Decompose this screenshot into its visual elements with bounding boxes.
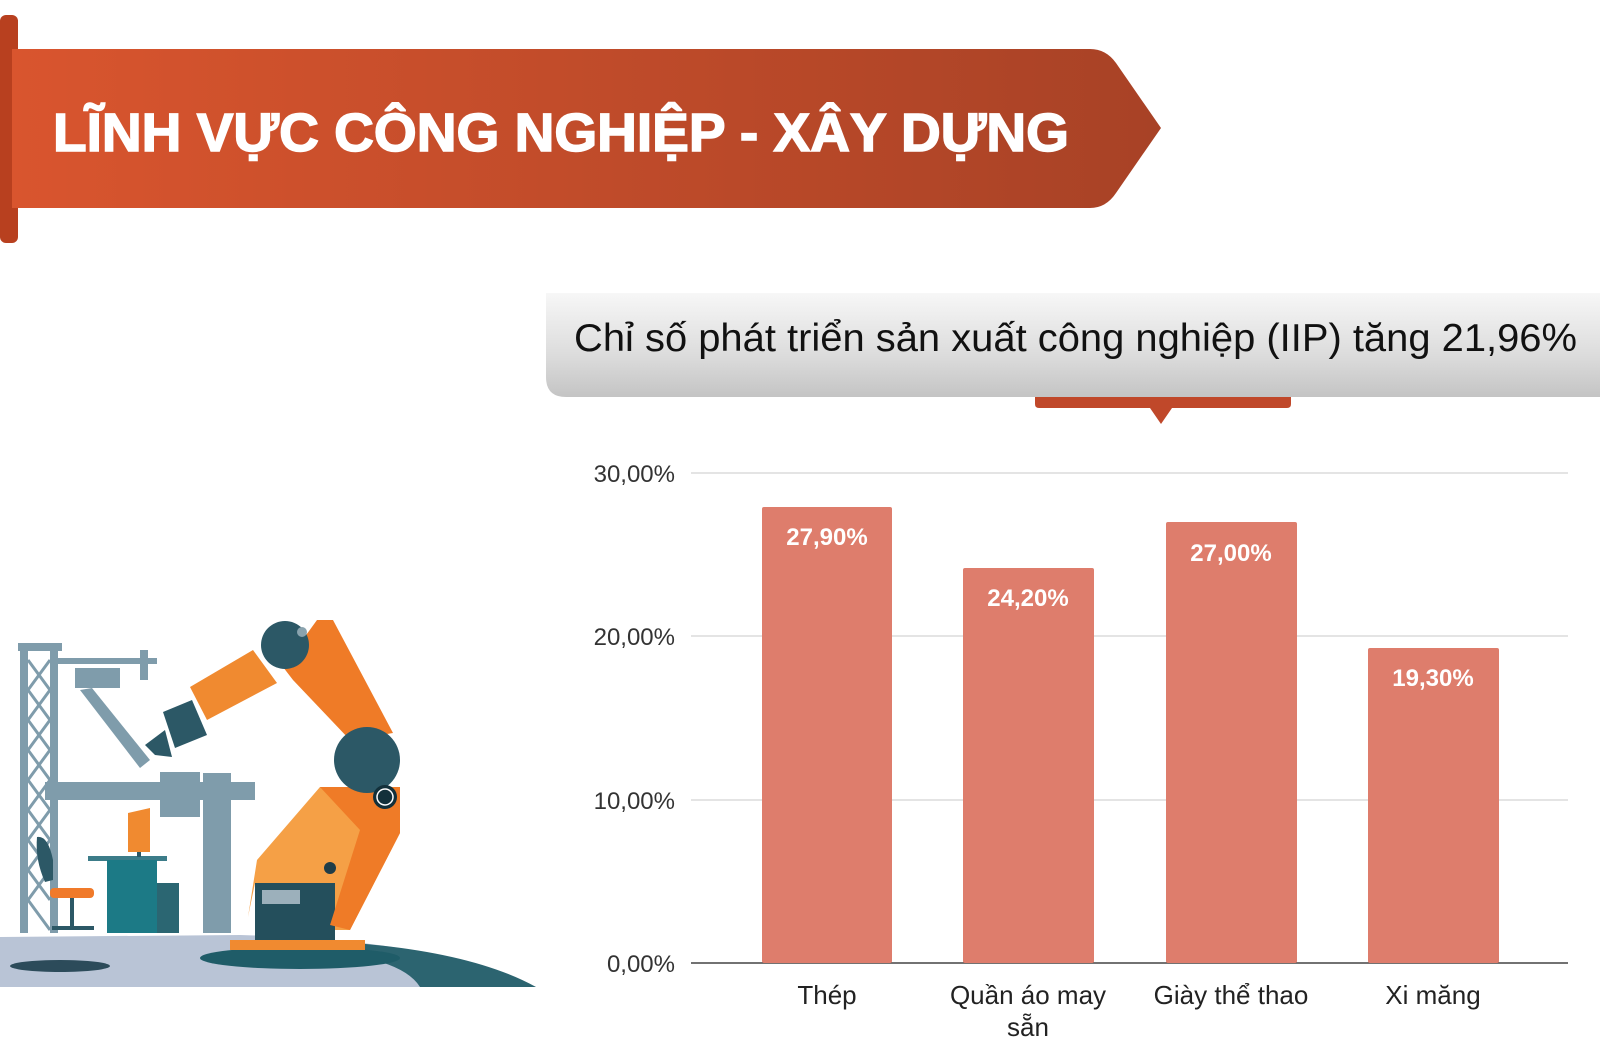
title banner — [0, 15, 1161, 243]
x axis labels — [797, 980, 1481, 1042]
value labels: 24,20% — [987, 585, 1069, 612]
illustration: industrial robot arm — [0, 620, 536, 987]
subtitle banner — [546, 293, 1600, 424]
title text: LĨNH VỰC CÔNG NGHIỆP - XÂY DỰNG — [53, 102, 1069, 163]
x axis labels: Xi măng — [1385, 980, 1481, 1010]
subtitle text: Chỉ số phát triển sản xuất công nghiệp (IIP) tăng 21,96% — [574, 317, 1577, 360]
y axis labels: 20,00% — [594, 624, 675, 651]
y axis labels: 30,00% — [594, 461, 675, 488]
x axis labels: Giày thể thao — [1154, 980, 1308, 1010]
x axis labels: Thép — [797, 980, 857, 1010]
value labels — [786, 524, 1474, 692]
value labels: 27,90% — [786, 524, 868, 551]
bar chart — [594, 461, 1568, 1042]
bars — [762, 507, 1499, 963]
value labels: 27,00% — [1190, 540, 1272, 567]
y axis labels: 0,00% — [607, 951, 675, 978]
x axis labels: Quần áo may — [950, 980, 1106, 1010]
x axis labels: sẵn — [1007, 1012, 1049, 1042]
value labels: 19,30% — [1392, 665, 1474, 692]
y axis labels — [594, 461, 675, 978]
y axis labels: 10,00% — [594, 788, 675, 815]
